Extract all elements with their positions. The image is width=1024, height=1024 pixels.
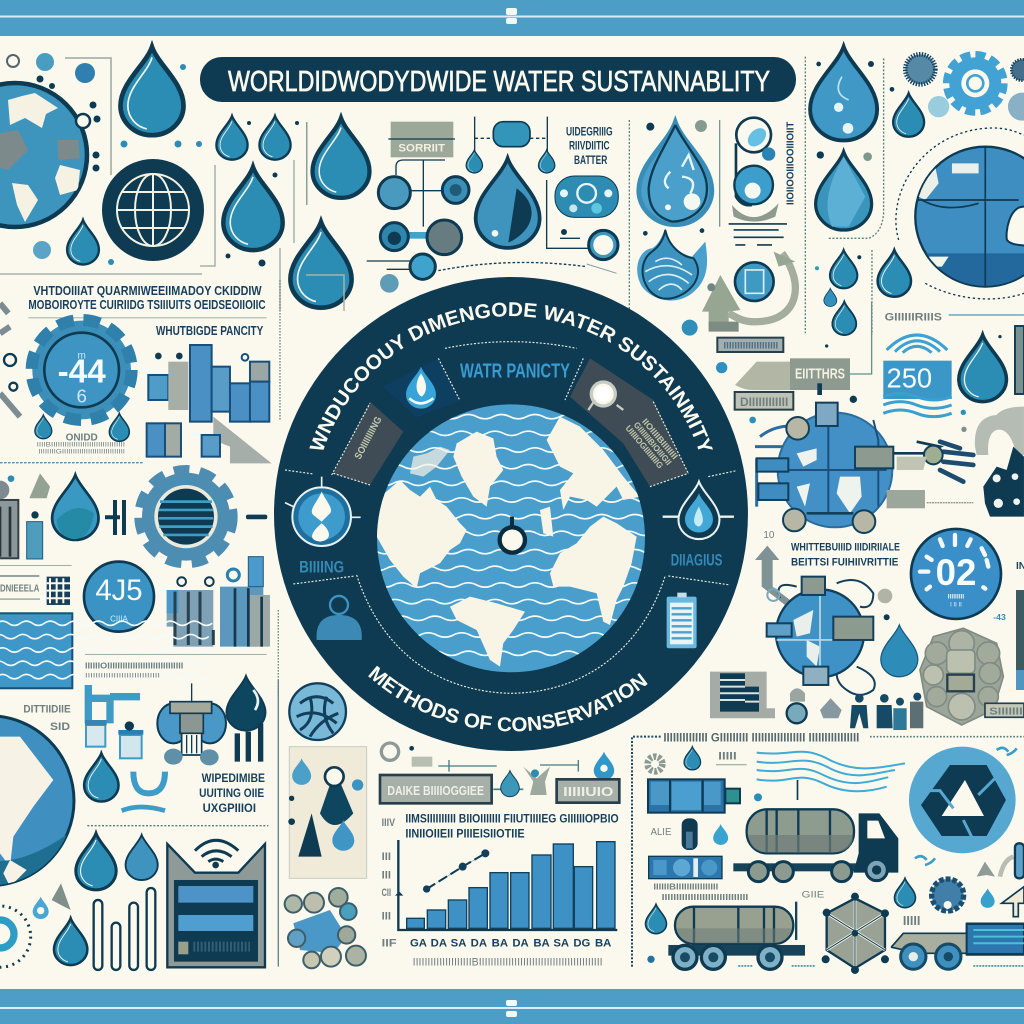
panel: flowchart — [367, 117, 618, 293]
label box right: IIIIIUIO — [563, 784, 613, 799]
wave chart — [0, 613, 212, 688]
drops column — [810, 47, 924, 335]
text block: UXGPIIIOI — [203, 801, 256, 815]
label box left: DAIKE BIIIIOGGIEE — [387, 783, 484, 798]
chart heading: IIMSIIIIIIIIII BIIOIIIIIII FIIUTIIIIEG GIIIIIIOPBIO — [405, 812, 619, 826]
gray segment left: SOIIIIIIIING — [353, 415, 385, 461]
small bars — [237, 723, 261, 762]
axis caption: IIIIIIIIIIIIIIIIIIIIBIIIIIIIIIIIIIIIIIIIIIIIIIIIIIIIIIIIIIIIIII — [413, 957, 603, 969]
drop — [959, 335, 1006, 402]
panel: bottom right: IIIII — [903, 914, 920, 928]
molecule blob — [555, 176, 618, 217]
segment label: WATR PANICTY — [460, 360, 570, 382]
flowchart label: BATTER — [574, 153, 608, 167]
icon: clipboard — [667, 593, 697, 648]
panel: chart: BA — [492, 938, 508, 950]
ring icon — [0, 906, 31, 967]
top gadgets — [381, 743, 614, 795]
axis labels: IIF — [382, 938, 397, 950]
globe: center map — [377, 404, 645, 672]
cloud — [975, 407, 1024, 455]
text block — [199, 771, 265, 815]
gray boxes: DIIIIIIIIIIII — [740, 395, 788, 409]
drop and dot — [645, 904, 666, 963]
drop — [881, 625, 918, 677]
axis labels: CII — [382, 887, 391, 899]
stat circle 4J5: CIIIA — [110, 615, 129, 624]
flowchart label: RIIVDIITIC — [569, 138, 610, 152]
waves — [757, 752, 905, 791]
fuel pump and drop: ALIE — [651, 827, 672, 838]
globe: network — [755, 403, 925, 533]
gear: 44 stat: m — [77, 350, 86, 361]
gears — [905, 54, 1024, 121]
badge and house — [787, 688, 842, 723]
dots — [643, 61, 894, 270]
gray segment left — [333, 402, 403, 485]
caption — [85, 662, 183, 679]
icon: person — [317, 596, 362, 640]
panel: chart: GA — [410, 938, 427, 950]
valve machine — [157, 683, 226, 765]
fancy bubble drop — [639, 122, 712, 225]
crown icon — [983, 447, 1024, 517]
axis labels — [382, 817, 397, 950]
panel: left middle — [0, 280, 280, 697]
label: right: DIIAGIUS — [671, 551, 722, 570]
panel: chart: SA — [451, 938, 466, 950]
large half-dark drop — [476, 158, 540, 248]
label: left: BIIIING — [299, 557, 344, 576]
brain globe — [289, 683, 346, 740]
gear: 44 stat — [32, 320, 132, 420]
heading text: VHTDOIIIAT QUARMIWEEIIMADOY CKIDDIW — [33, 284, 262, 298]
panel: top right drops — [629, 47, 1024, 337]
hand — [893, 442, 973, 482]
panel: central wheel — [274, 277, 748, 751]
globe: right panel — [896, 128, 1024, 299]
flowchart nodes — [378, 177, 618, 279]
panel: chart — [380, 743, 619, 969]
flowchart label — [566, 124, 613, 167]
dots — [716, 335, 1002, 432]
bubble cluster — [285, 888, 366, 968]
wrench fragment — [0, 303, 20, 417]
right edge slivers — [1015, 326, 1024, 690]
building — [710, 672, 775, 718]
water cloud icon — [493, 122, 530, 147]
panel: flowchart: SORRIIT — [398, 143, 446, 155]
center pin — [500, 517, 525, 553]
drops — [33, 753, 158, 965]
bar chart — [395, 840, 617, 930]
gray boxes: EIITTHRS — [795, 366, 845, 382]
stat circle 02: IIIIIIIII — [948, 593, 964, 600]
poster — [288, 747, 367, 878]
drops and gear — [894, 843, 1024, 917]
chart heading: IINIIOIIEII PIIIEISIIOTIIE — [405, 826, 525, 840]
panel: chart: DG — [573, 938, 590, 950]
gray segment right: GIIIIIIIBIOIIIGII — [632, 420, 674, 467]
truck lower — [668, 902, 805, 969]
blue panel lower — [649, 856, 722, 879]
fuel pump and drop — [651, 818, 728, 850]
panel: chart: DA — [471, 938, 487, 950]
gear and drop: IIIII — [718, 750, 737, 762]
axis labels: III — [382, 869, 391, 881]
router panel — [167, 840, 265, 967]
label box right — [557, 779, 619, 803]
gear caption: IIIIIIIIGIIIIIIIIIIIIIIIIIIIIIIIIIIIII — [38, 449, 125, 455]
second-row text: GIIE — [802, 889, 824, 899]
truck upper — [733, 809, 898, 882]
curved heading: top: WNDUCOOUY DIMENGODE WATER SUSTAINMITY — [309, 302, 713, 450]
caption: IIIIIIOIIIIIIIIIIIIIIIIIIIIIIIIIIIIII — [85, 662, 183, 671]
globe: lower — [767, 577, 892, 695]
label box: SIIIIIII — [989, 706, 1023, 717]
text block: WIPEDIMIBE — [202, 771, 265, 785]
label: DITTIIDIIE — [23, 704, 71, 716]
stat circle 4J5: 4J5 — [95, 574, 143, 607]
dotted inner rings — [285, 342, 737, 693]
icon: left circular drop — [285, 477, 361, 546]
buildings chart — [147, 345, 272, 463]
icon: water drops — [67, 47, 369, 308]
magnifier rings: IIOIIOOIIIOOIIIOIIT — [786, 122, 797, 205]
gear caption: ONIDD — [66, 433, 98, 444]
title — [200, 57, 796, 102]
small text and code: DNIEEELA — [0, 584, 39, 595]
label: right panel: GIIIIIIRIIIS — [885, 312, 942, 324]
gear and drop — [648, 747, 747, 771]
heading: WHITTEBUIIID IIIDIRIIALE — [791, 542, 900, 554]
gray arrow — [52, 883, 71, 910]
U-pipe — [122, 772, 165, 811]
top banner — [0, 0, 1024, 36]
stat circle 02 — [911, 529, 1001, 619]
small text and code — [0, 575, 70, 605]
panel: right middle: -43 — [993, 612, 1006, 622]
curved heading: bottom: METHODS OF CONSERVATION — [368, 666, 648, 732]
gear drops — [35, 413, 129, 441]
text block: UUITING OIIE — [199, 786, 264, 800]
bars of people — [167, 557, 270, 647]
swirl marks — [915, 748, 1017, 865]
heading: capacity: WHUTBIGDE PANCITY — [156, 324, 264, 338]
second-row text — [653, 881, 824, 902]
panel: bottom right — [632, 731, 1024, 974]
axis labels: III — [382, 910, 391, 922]
magnifier rings — [729, 118, 797, 245]
panel: chart: DA — [512, 938, 529, 950]
panel: chart: BA — [533, 938, 550, 950]
panel: chart: SA — [553, 938, 569, 950]
second-row text: IIIIIIIIIIIIIIIIIIIIIIIIIIIIII — [662, 892, 748, 902]
globe: bottom left — [0, 716, 74, 887]
gear caption: IIIIBIIIIIIIIIIIIIIIIIIIIIIIIIIIIIIIII — [37, 443, 125, 449]
recycle badge — [909, 747, 1016, 853]
gear caption — [37, 433, 125, 455]
stat circle 02: I II II — [950, 603, 962, 609]
label box — [985, 703, 1024, 717]
gear: 44 stat: -44 — [58, 354, 106, 391]
gray boxes — [717, 302, 872, 410]
arrow — [755, 546, 790, 605]
blue segment with drop — [383, 358, 460, 417]
small drops — [466, 150, 555, 173]
panel: chart: DA — [431, 938, 447, 950]
gray segment right — [570, 358, 688, 487]
250 stat — [883, 335, 952, 417]
pipes — [85, 685, 143, 758]
stat circle 02: 02 — [936, 552, 976, 593]
label box left — [380, 775, 492, 803]
recycle arrow and house — [682, 252, 795, 336]
gray segment right: IIOIIIIBIIIIIIII — [640, 417, 680, 461]
panel: chart: BA — [595, 938, 611, 950]
icon: right drop crosshair — [663, 482, 734, 539]
people group — [850, 693, 923, 730]
250 stat: 250 — [887, 362, 932, 393]
hex frame — [822, 893, 889, 974]
top text line: IIIIIIIIIIIIII GIIIIIIIII IIIIIIIIIIIIIIIII IIIIIIIIIIIIIIII — [663, 731, 859, 745]
people — [0, 473, 50, 559]
heading — [791, 542, 900, 568]
axis labels: III — [382, 851, 391, 863]
panel: left bottom — [0, 676, 367, 970]
tube bars — [94, 888, 155, 970]
outer ring — [274, 277, 748, 751]
panel: right middle: 10 — [763, 530, 775, 541]
gear: 44 stat: 6 — [76, 386, 87, 407]
chart heading — [405, 812, 619, 840]
dark drop — [226, 676, 265, 731]
drop — [52, 475, 99, 540]
axis labels: IIIV — [382, 817, 395, 829]
caption: IIIIIIIIIIIIIIIIIIIIIIIIIIIII — [85, 672, 160, 679]
label: SID — [50, 721, 70, 733]
globe: top left — [0, 53, 111, 259]
panel: top-left drops and globes — [0, 47, 370, 311]
blue panel — [648, 779, 740, 813]
connector drop — [493, 771, 523, 797]
bottom banner — [0, 989, 1024, 1024]
gray ornament — [920, 628, 1003, 725]
drops — [832, 302, 856, 335]
label — [23, 704, 71, 733]
panel: right middle — [710, 302, 1024, 730]
swirl drop — [637, 228, 707, 301]
label: right panel — [885, 312, 1024, 324]
second-row text: IIIIIIBIIIIIIIIIIIIIIII — [653, 881, 718, 891]
stat circle 4J5 — [84, 562, 154, 632]
flowchart label: UIDEGRIIIG — [566, 124, 613, 138]
title: WORLDIDWODYDWIDE WATER SUSTANNABLITY — [228, 66, 770, 98]
gray boxes: IIIIIIIIIIIIIIIIIIII — [723, 341, 778, 351]
icon: wireframe globe — [102, 159, 204, 261]
flatbed truck — [892, 923, 1024, 969]
gear: stripes — [141, 472, 267, 562]
heading text: MOBOIROYTE CUIRIIDG TSIIIUITS OEIDSEOIIOIIC — [28, 298, 266, 312]
gray segment right: UIIIIOGIIIIIIIIG — [623, 423, 666, 471]
heading: BEITTSI FUIHIIVRITTIE — [791, 556, 898, 568]
heading text — [28, 284, 266, 312]
